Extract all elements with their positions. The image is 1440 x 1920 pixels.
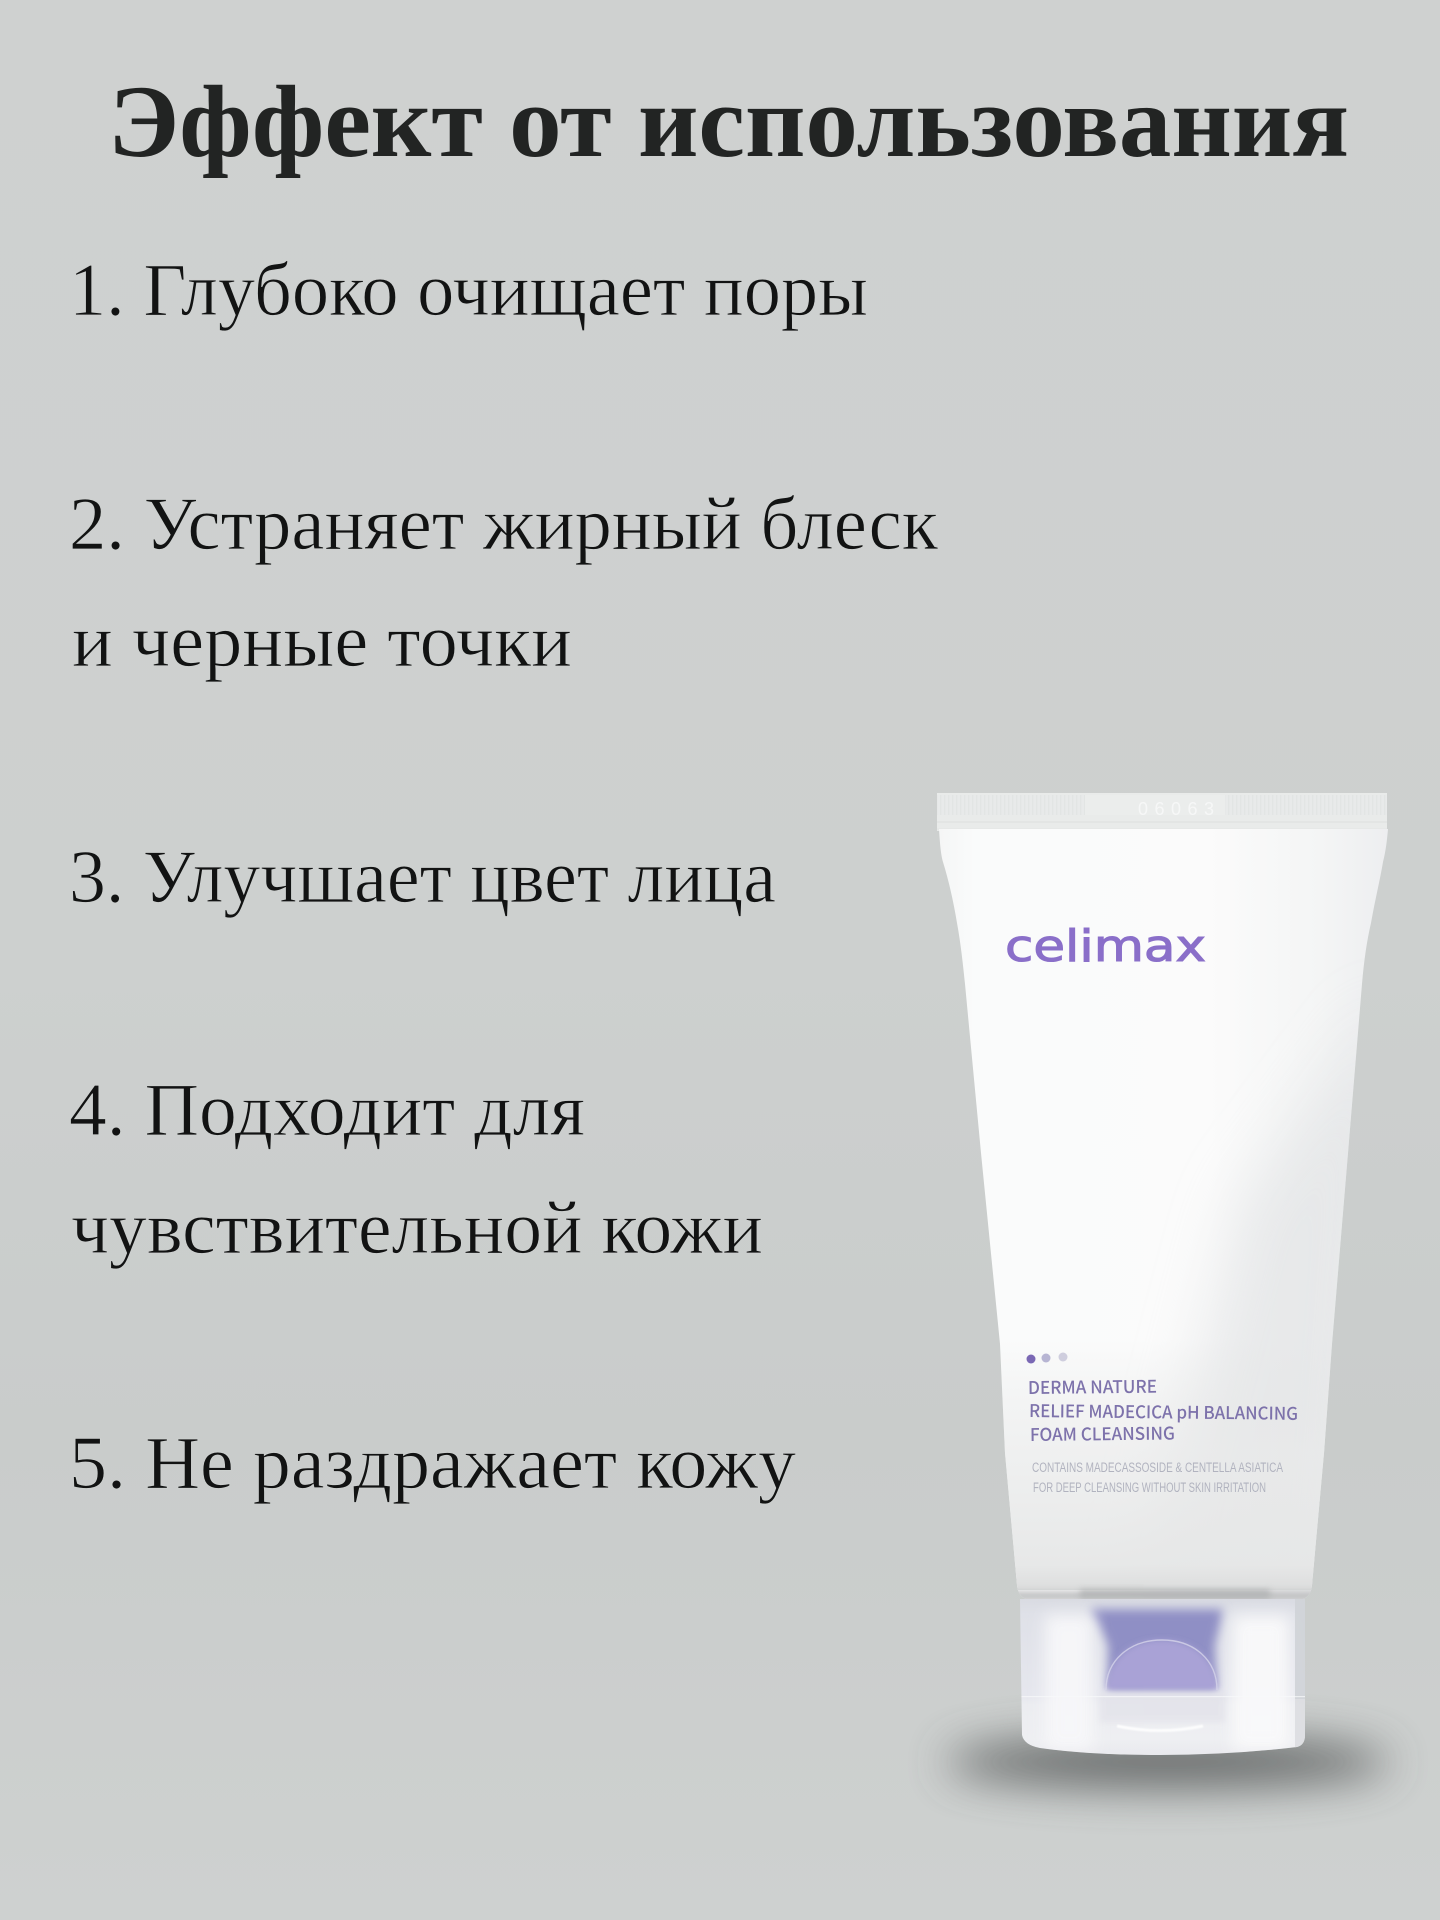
tube body [930,829,1390,1620]
cap pump inside [1090,1609,1223,1690]
product description [1032,1460,1283,1495]
effect 4 [69,1069,763,1270]
effect 5: 5. Не раздражает кожу [69,1422,796,1505]
effect 4: 4. Подходит для [69,1069,585,1152]
effect 2: и черные точки [72,600,572,683]
product name: RELIEF MADECICA pH BALANCING [1029,1398,1298,1426]
product: celimax tube [930,793,1390,1787]
three dots [1026,1352,1068,1364]
product description: FOR DEEP CLEANSING WITHOUT SKIN IRRITATION [1033,1480,1266,1495]
effect 1: 1. Глубоко очищает поры [69,249,868,332]
tube crimp [937,793,1387,831]
effect 2: 2. Устраняет жирный блеск [69,483,939,566]
effect 4: чувствительной кожи [71,1187,763,1270]
product description: CONTAINS MADECASSOSIDE & CENTELLA ASIATICA [1032,1460,1283,1475]
tube crimp: 06063 [1138,799,1214,819]
product name: DERMA NATURE [1028,1374,1157,1400]
title: Эффект от использования [108,65,1349,179]
list of effects [69,249,939,1505]
floor shadow [946,1737,1390,1787]
product name [1028,1374,1298,1447]
effect 3: 3. Улучшает цвет лица [69,836,776,919]
brand logo: celimax [1005,921,1206,972]
cap [1020,1599,1305,1755]
product name: FOAM CLEANSING [1030,1420,1175,1447]
effect 2 [69,483,939,683]
